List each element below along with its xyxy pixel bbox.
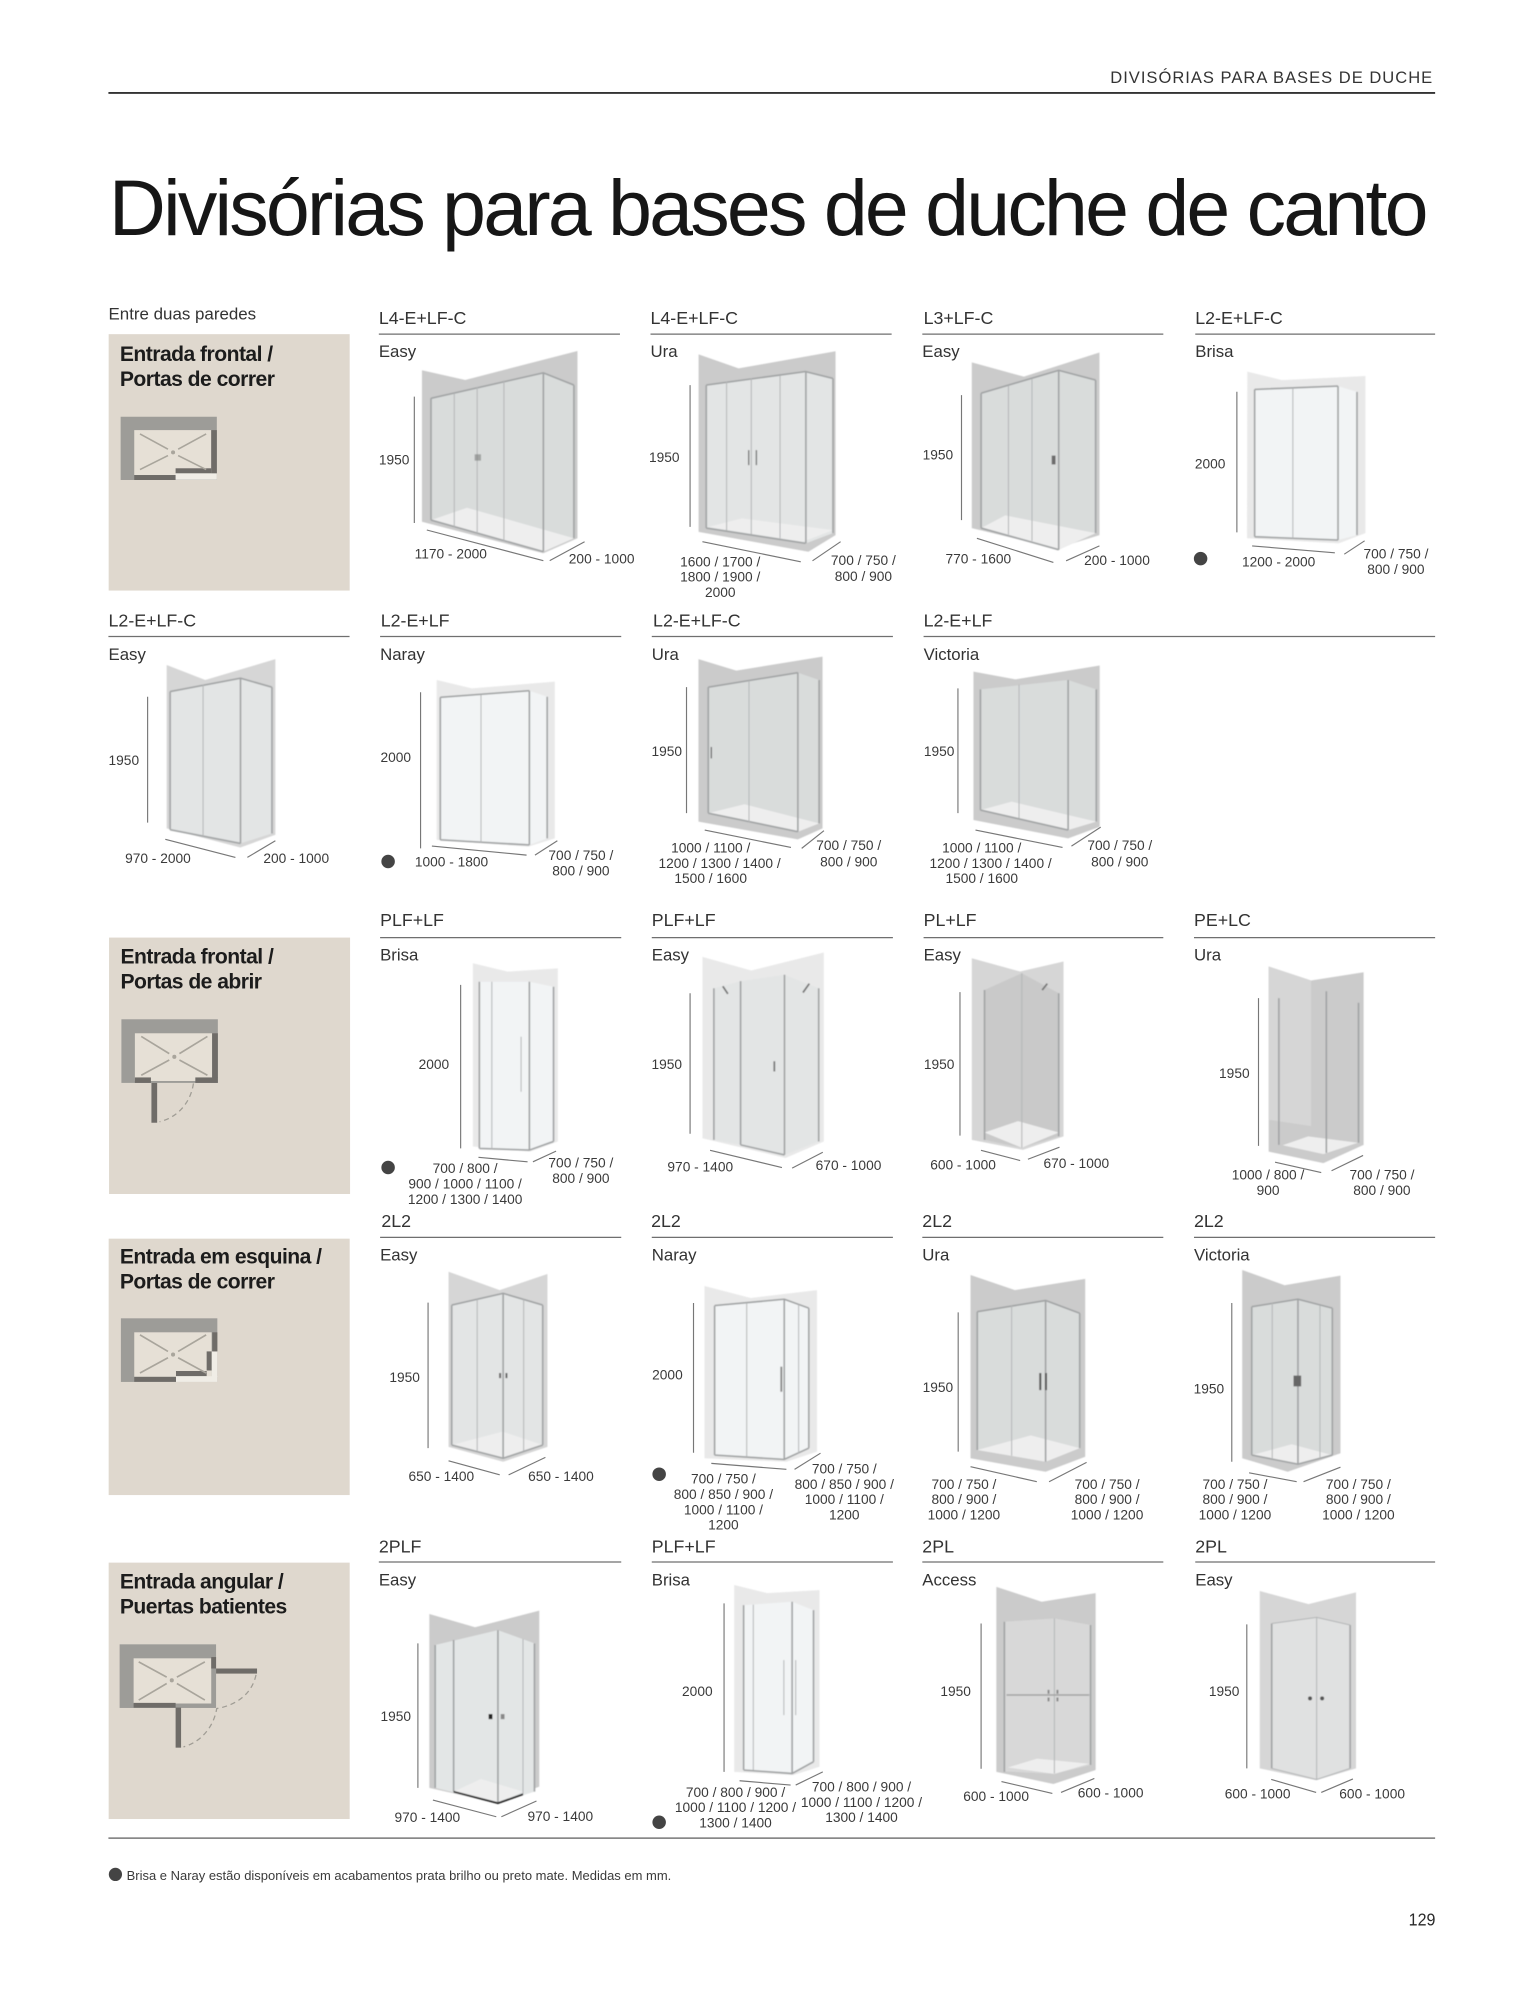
finish dot: [381, 1161, 395, 1174]
shower illustration: [996, 1587, 1096, 1784]
product: 2PL Easy: [1195, 1536, 1435, 1802]
dimensions: 2000: [705, 585, 736, 600]
shower illustration: [429, 1611, 539, 1803]
dimensions: 2000: [682, 1684, 713, 1699]
shower illustration: [973, 666, 1100, 838]
dimensions: [109, 697, 329, 866]
panel heading: Puertas batientes: [120, 1596, 287, 1619]
dimensions: [924, 688, 1152, 886]
dimensions: 1950: [923, 1380, 953, 1395]
icon: plan of sliding front entry: [121, 417, 217, 480]
icon: plan of hinged corner entry: [120, 1644, 257, 1748]
product: PLF+LF Brisa: [380, 910, 621, 1207]
model code: 2PLF: [379, 1536, 421, 1556]
dimensions: [379, 397, 635, 567]
dimensions: 1950: [1209, 1684, 1240, 1699]
dimensions: 1950: [380, 1709, 411, 1724]
product: L2-E+LF Victoria: [924, 610, 1435, 886]
product: 2L2 Ura: [922, 1211, 1163, 1522]
product: PE+LC Ura: [1194, 910, 1435, 1198]
dimensions: 1950: [1194, 1381, 1225, 1396]
dimensions: 700 / 750 /: [1203, 1477, 1267, 1492]
model code: 2L2: [1194, 1211, 1224, 1231]
shower illustration: [449, 1272, 547, 1462]
series name: Brisa: [652, 1571, 691, 1590]
model code: PL+LF: [924, 910, 977, 930]
dimensions: 1200: [829, 1507, 860, 1522]
dimensions: 800 / 900: [1353, 1183, 1411, 1198]
series name: Easy: [652, 945, 690, 964]
dimensions: 1950: [940, 1684, 971, 1699]
dimensions: [923, 395, 1150, 568]
dimensions: 600 - 1000: [1225, 1787, 1291, 1802]
finish dot: [381, 855, 395, 868]
dimensions: 900: [1257, 1183, 1280, 1198]
shower illustration: [702, 952, 824, 1158]
product: 2PLF Easy: [379, 1536, 621, 1825]
panel heading: Entrada angular /: [120, 1571, 283, 1594]
shower illustration: [972, 958, 1064, 1150]
dimensions: 1000 / 1100 /: [805, 1492, 884, 1507]
dimensions: 1000 - 1800: [415, 855, 489, 870]
dimensions: 2000: [1195, 456, 1226, 471]
dimensions: 700 / 750 /: [548, 848, 613, 863]
dimensions: 1300 / 1400: [699, 1815, 772, 1830]
product: 2L2 Victoria: [1194, 1211, 1435, 1522]
dimensions: 770 - 1600: [945, 552, 1012, 567]
dimensions: 1950: [649, 450, 680, 465]
model code: L2-E+LF: [924, 610, 992, 630]
panel heading: Entrada em esquina /: [120, 1246, 322, 1269]
dimensions: [923, 1312, 1144, 1522]
dimensions: [380, 692, 614, 878]
shower illustration: [167, 659, 275, 847]
model code: 2L2: [381, 1211, 411, 1231]
dimensions: 800 / 900 /: [1203, 1492, 1268, 1507]
series name: Ura: [922, 1245, 950, 1264]
shower illustration: [473, 963, 558, 1152]
product: L4-E+LF-C Easy: [379, 308, 635, 567]
model code: L2-E+LF-C: [653, 610, 741, 630]
dimensions: 1200 / 1300 / 1400 /: [930, 856, 1052, 871]
dimensions: 1000 / 1200: [1071, 1507, 1144, 1522]
dimensions: 1950: [924, 1057, 955, 1072]
dimensions: [1219, 998, 1415, 1198]
dimensions: 1000 / 1100 / 1200 /: [675, 1800, 796, 1815]
dimensions: 1600 / 1700 /: [680, 554, 760, 569]
dimensions: 1950: [109, 753, 139, 768]
dimensions: 1950: [379, 452, 410, 467]
dimensions: 2000: [380, 750, 411, 765]
dimensions: 1950: [652, 744, 682, 759]
dimensions: 700 / 800 / 900 /: [812, 1780, 911, 1795]
dimensions: [652, 687, 881, 886]
dimensions: 1000 / 1100 / 1200 /: [801, 1795, 922, 1810]
product: L2-E+LF-C Easy: [108, 610, 350, 866]
series name: Easy: [379, 1571, 417, 1590]
dimensions: 1000 / 1200: [1322, 1507, 1395, 1522]
shower illustration: [437, 680, 555, 847]
dimensions: 700 / 750 /: [1075, 1477, 1140, 1492]
dimensions: 600 - 1000: [1339, 1787, 1405, 1802]
dimensions: 1000 / 1100 /: [684, 1502, 763, 1517]
dimensions: 1000 / 1100 /: [671, 841, 750, 856]
series name: Brisa: [380, 945, 419, 964]
shower illustration: [422, 351, 577, 553]
series name: Victoria: [1194, 1245, 1250, 1264]
product: L3+LF-C Easy: [922, 308, 1163, 568]
section label: entre duas paredes: Entre duas paredes: [109, 304, 256, 323]
dimensions: 800 / 900 /: [1326, 1492, 1391, 1507]
model code: PE+LC: [1194, 910, 1251, 930]
dimensions: 1950: [1219, 1066, 1250, 1081]
product: L2-E+LF-C Brisa: [1194, 308, 1435, 577]
dimensions: 700 / 750 /: [1363, 547, 1428, 562]
dimensions: [924, 992, 1109, 1172]
panel heading: Portas de correr: [120, 368, 275, 391]
series name: Easy: [380, 1245, 418, 1264]
dimensions: 800 / 900: [552, 863, 610, 878]
dimensions: 200 - 1000: [1084, 553, 1150, 568]
model code: L2-E+LF-C: [1195, 308, 1283, 328]
model code: PLF+LF: [652, 910, 716, 930]
dimensions: 700 / 750 /: [812, 1462, 877, 1477]
dimensions: 670 - 1000: [816, 1158, 882, 1173]
dimensions: 800 / 900 /: [1075, 1492, 1140, 1507]
dimensions: 970 - 1400: [527, 1809, 593, 1824]
dimensions: 900 / 1000 / 1100 /: [408, 1177, 522, 1192]
panel heading: Portas de correr: [120, 1270, 275, 1293]
dimensions: 700 / 800 /: [433, 1161, 498, 1176]
model code: L2-E+LF-C: [109, 610, 196, 630]
shower illustration: [972, 352, 1099, 550]
dimensions: 200 - 1000: [569, 552, 635, 567]
dimensions: 670 - 1000: [1043, 1156, 1109, 1171]
shower illustration: [704, 1286, 817, 1462]
series name: Easy: [109, 645, 146, 664]
dimensions: [1195, 392, 1429, 577]
model code: 2L2: [651, 1211, 681, 1231]
dimensions: 700 / 750 /: [548, 1156, 613, 1171]
dimensions: 700 / 750 /: [1087, 838, 1152, 853]
dimensions: 800 / 900 /: [931, 1492, 997, 1507]
series name: Easy: [922, 342, 960, 361]
dimensions: [408, 985, 614, 1207]
title: Divisórias para bases de duche de canto: [109, 164, 1429, 252]
dimensions: 2000: [652, 1367, 683, 1382]
finish dot: [652, 1467, 666, 1481]
dimensions: 970 - 2000: [125, 851, 191, 866]
dimensions: 1950: [652, 1057, 682, 1072]
panel heading: Entrada frontal /: [120, 343, 273, 366]
shower illustration: [734, 1585, 819, 1775]
dimensions: 970 - 1400: [667, 1159, 733, 1174]
dimensions: 1950: [389, 1370, 420, 1385]
dimensions: 800 / 850 / 900 /: [795, 1477, 894, 1492]
shower illustration: [1260, 1591, 1356, 1780]
dimensions: 1000 / 1200: [1199, 1507, 1272, 1522]
dimensions: 800 / 900: [1091, 855, 1149, 870]
model code: 2PL: [922, 1536, 954, 1556]
dimensions: 1170 - 2000: [415, 547, 487, 562]
dimensions: 700 / 800 / 900 /: [686, 1785, 785, 1800]
product: PLF+LF Brisa corner: [652, 1536, 922, 1830]
dimensions: 200 - 1000: [263, 851, 329, 866]
dimensions: 1200: [708, 1518, 739, 1533]
dimensions: [389, 1303, 594, 1484]
product: PLF+LF Easy: [652, 910, 893, 1174]
finish dot: [1194, 552, 1207, 565]
series name: Easy: [924, 945, 961, 964]
model code: 2PL: [1195, 1536, 1227, 1556]
model code: 2L2: [922, 1211, 952, 1231]
dimensions: [652, 1303, 894, 1533]
dimensions: 600 - 1000: [963, 1789, 1029, 1804]
dimensions: 1200 - 2000: [1242, 554, 1316, 569]
dimensions: 700 / 750 /: [691, 1472, 756, 1487]
shower illustration: [1269, 966, 1364, 1163]
page header: section label: DIVISÓRIAS PARA BASES DE DUCHE: [1110, 68, 1432, 87]
dimensions: 600 - 1000: [930, 1157, 996, 1172]
series name: Victoria: [924, 645, 980, 664]
series name: Naray: [380, 645, 425, 664]
series name: Easy: [379, 342, 417, 361]
dimensions: 800 / 900: [552, 1171, 610, 1186]
model code: PLF+LF: [380, 910, 444, 930]
dimensions: 1800 / 1900 /: [680, 570, 761, 585]
icon: plan of hinged front entry: [121, 1019, 218, 1123]
dimensions: 1300 / 1400: [825, 1810, 898, 1825]
dimensions: 1200 / 1300 / 1400: [408, 1192, 523, 1207]
dimensions: 650 - 1400: [408, 1469, 475, 1484]
dimensions: 1950: [924, 744, 955, 759]
series name: Easy: [1195, 1571, 1233, 1590]
model code: PLF+LF: [652, 1536, 716, 1556]
panel heading: Entrada frontal /: [121, 945, 273, 968]
dimensions: 700 / 750 /: [1326, 1477, 1391, 1492]
dimensions: 1000 / 1100 /: [942, 841, 1021, 856]
model code: L2-E+LF: [381, 610, 450, 630]
dimensions: 1950: [923, 447, 953, 462]
series name: Ura: [1194, 945, 1222, 964]
dimensions: 700 / 750 /: [831, 553, 896, 568]
dimensions: 1500 / 1600: [945, 871, 1018, 886]
panel: entrada angular, puertas batientes: [109, 1563, 350, 1819]
dimensions: 650 - 1400: [528, 1469, 594, 1484]
dimensions: 970 - 1400: [394, 1810, 461, 1825]
finish dot: [652, 1815, 666, 1829]
dimensions: [1194, 1303, 1395, 1522]
series name: Naray: [652, 1245, 697, 1264]
product: PL+LF Easy: [924, 910, 1163, 1172]
dimensions: 1000 / 1200: [928, 1507, 1001, 1522]
model code: L4-E+LF-C: [379, 308, 467, 328]
model code: L3+LF-C: [924, 308, 993, 328]
model code: L4-E+LF-C: [651, 308, 738, 328]
dimensions: 700 / 750 /: [931, 1477, 996, 1492]
series name: Ura: [651, 342, 678, 361]
dimensions: 800 / 900: [820, 855, 878, 870]
dimensions: 800 / 900: [1367, 562, 1425, 577]
dimensions: 800 / 850 / 900 /: [674, 1487, 773, 1502]
dimensions: [652, 993, 882, 1174]
shower illustration: [1242, 1270, 1340, 1472]
dimensions: 1000 / 800 /: [1232, 1168, 1304, 1183]
panel: entrada frontal, portas de abrir: [109, 938, 350, 1194]
panel: entrada em esquina, portas de correr: [109, 1239, 350, 1495]
dimensions: [675, 1603, 922, 1830]
product: 2L2 Naray: [651, 1211, 894, 1533]
product: L2-E+LF Naray: [380, 610, 621, 878]
dimensions: 800 / 900: [835, 569, 892, 584]
shower illustration: [971, 1275, 1085, 1472]
series name: Access: [922, 1571, 976, 1590]
series name: Brisa: [1195, 342, 1234, 361]
icon: plan of sliding corner entry: [121, 1318, 217, 1382]
shower illustration: [698, 657, 823, 839]
page number: 129: [1409, 1909, 1435, 1929]
dimensions: [940, 1623, 1144, 1804]
dimensions: 2000: [419, 1057, 450, 1072]
product: L2-E+LF-C Ura: [652, 610, 893, 886]
panel: entrada frontal, portas de correr: [109, 334, 350, 591]
dimensions: 1200 / 1300 / 1400 /: [658, 856, 781, 871]
dimensions: 700 / 750 /: [816, 838, 881, 853]
dimensions: 600 - 1000: [1078, 1785, 1144, 1800]
dimensions: [649, 385, 896, 600]
panel heading: Portas de abrir: [121, 970, 262, 993]
dimensions: 700 / 750 /: [1349, 1168, 1414, 1183]
dimensions: [1209, 1624, 1405, 1802]
dimensions: [380, 1643, 593, 1825]
series name: Ura: [652, 645, 679, 664]
shower illustration: [699, 351, 836, 552]
shower illustration: [1247, 372, 1365, 543]
dimensions: 1500 / 1600: [674, 871, 747, 886]
product: 2L2 Easy: [380, 1211, 621, 1484]
product: L4-E+LF-C Ura: [649, 308, 896, 600]
footnote: Brisa e Naray estão disponíveis em acabamentos prata brilho ou preto mate. Medidas em mm.: [127, 1868, 671, 1883]
product: 2PL Access: [922, 1536, 1163, 1804]
